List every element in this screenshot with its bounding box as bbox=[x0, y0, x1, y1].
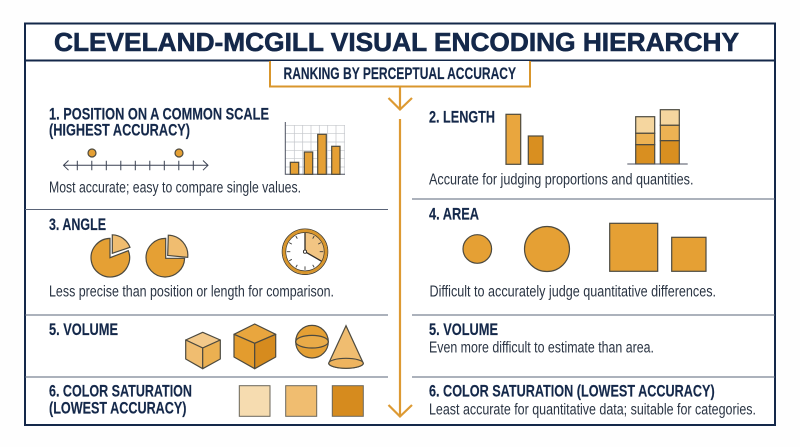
sphere bbox=[296, 325, 328, 358]
description: area: Difficult to accurately judge quantitative differences. bbox=[430, 284, 716, 301]
panel: position on a common scale bbox=[49, 106, 345, 196]
panel: volume left bbox=[49, 321, 363, 369]
heading: length: 2. LENGTH bbox=[429, 109, 495, 127]
panel: length bbox=[429, 109, 694, 188]
central arrow bbox=[388, 87, 412, 416]
clock bbox=[282, 229, 328, 274]
heading: angle: 3. ANGLE bbox=[49, 216, 106, 234]
title: CLEVELAND-MCGILL VISUAL ENCODING HIERARCHY bbox=[54, 29, 739, 57]
heading: position: 1. POSITION ON A COMMON SCALE bbox=[49, 106, 269, 124]
heading: volume: 5. VOLUME bbox=[49, 321, 118, 339]
panel: color saturation left bbox=[49, 383, 363, 417]
cone bbox=[329, 326, 363, 368]
saturation swatches bbox=[239, 386, 363, 416]
small cube bbox=[186, 332, 220, 369]
panel: area bbox=[429, 206, 716, 301]
length bars bbox=[506, 114, 543, 164]
ranking banner bbox=[270, 61, 530, 86]
heading: highest accuracy: (HIGHEST ACCURACY) bbox=[49, 121, 190, 139]
panel: color saturation right bbox=[429, 383, 756, 418]
heading: volume: 5. VOLUME bbox=[429, 321, 498, 339]
pie chart A bbox=[91, 235, 130, 277]
description: volume: Even more difficult to estimate than area. bbox=[429, 340, 654, 357]
panel: volume right bbox=[429, 321, 654, 357]
area circles bbox=[463, 226, 570, 272]
description: angle: Less precise than position or length for comparison. bbox=[49, 284, 334, 301]
ranking banner: RANKING BY PERCEPTUAL ACCURACY bbox=[284, 65, 516, 83]
description: position: Most accurate; easy to compare single values. bbox=[49, 180, 301, 196]
bar chart bbox=[285, 122, 345, 174]
large cube bbox=[234, 324, 276, 369]
pie chart B bbox=[146, 235, 188, 277]
heading: area: 4. AREA bbox=[429, 206, 479, 224]
heading: color saturation: 6. COLOR SATURATION (LOWEST ACCURACY) bbox=[429, 383, 715, 401]
description: length: Accurate for judging proportions and quantities. bbox=[429, 172, 694, 188]
number line bbox=[64, 149, 208, 170]
panel: angle bbox=[49, 216, 334, 301]
heading: lowest accuracy: (LOWEST ACCURACY) bbox=[49, 399, 186, 417]
stacked bars bbox=[627, 110, 688, 164]
area squares bbox=[610, 223, 706, 271]
heading: color saturation: 6. COLOR SATURATION bbox=[49, 383, 192, 401]
